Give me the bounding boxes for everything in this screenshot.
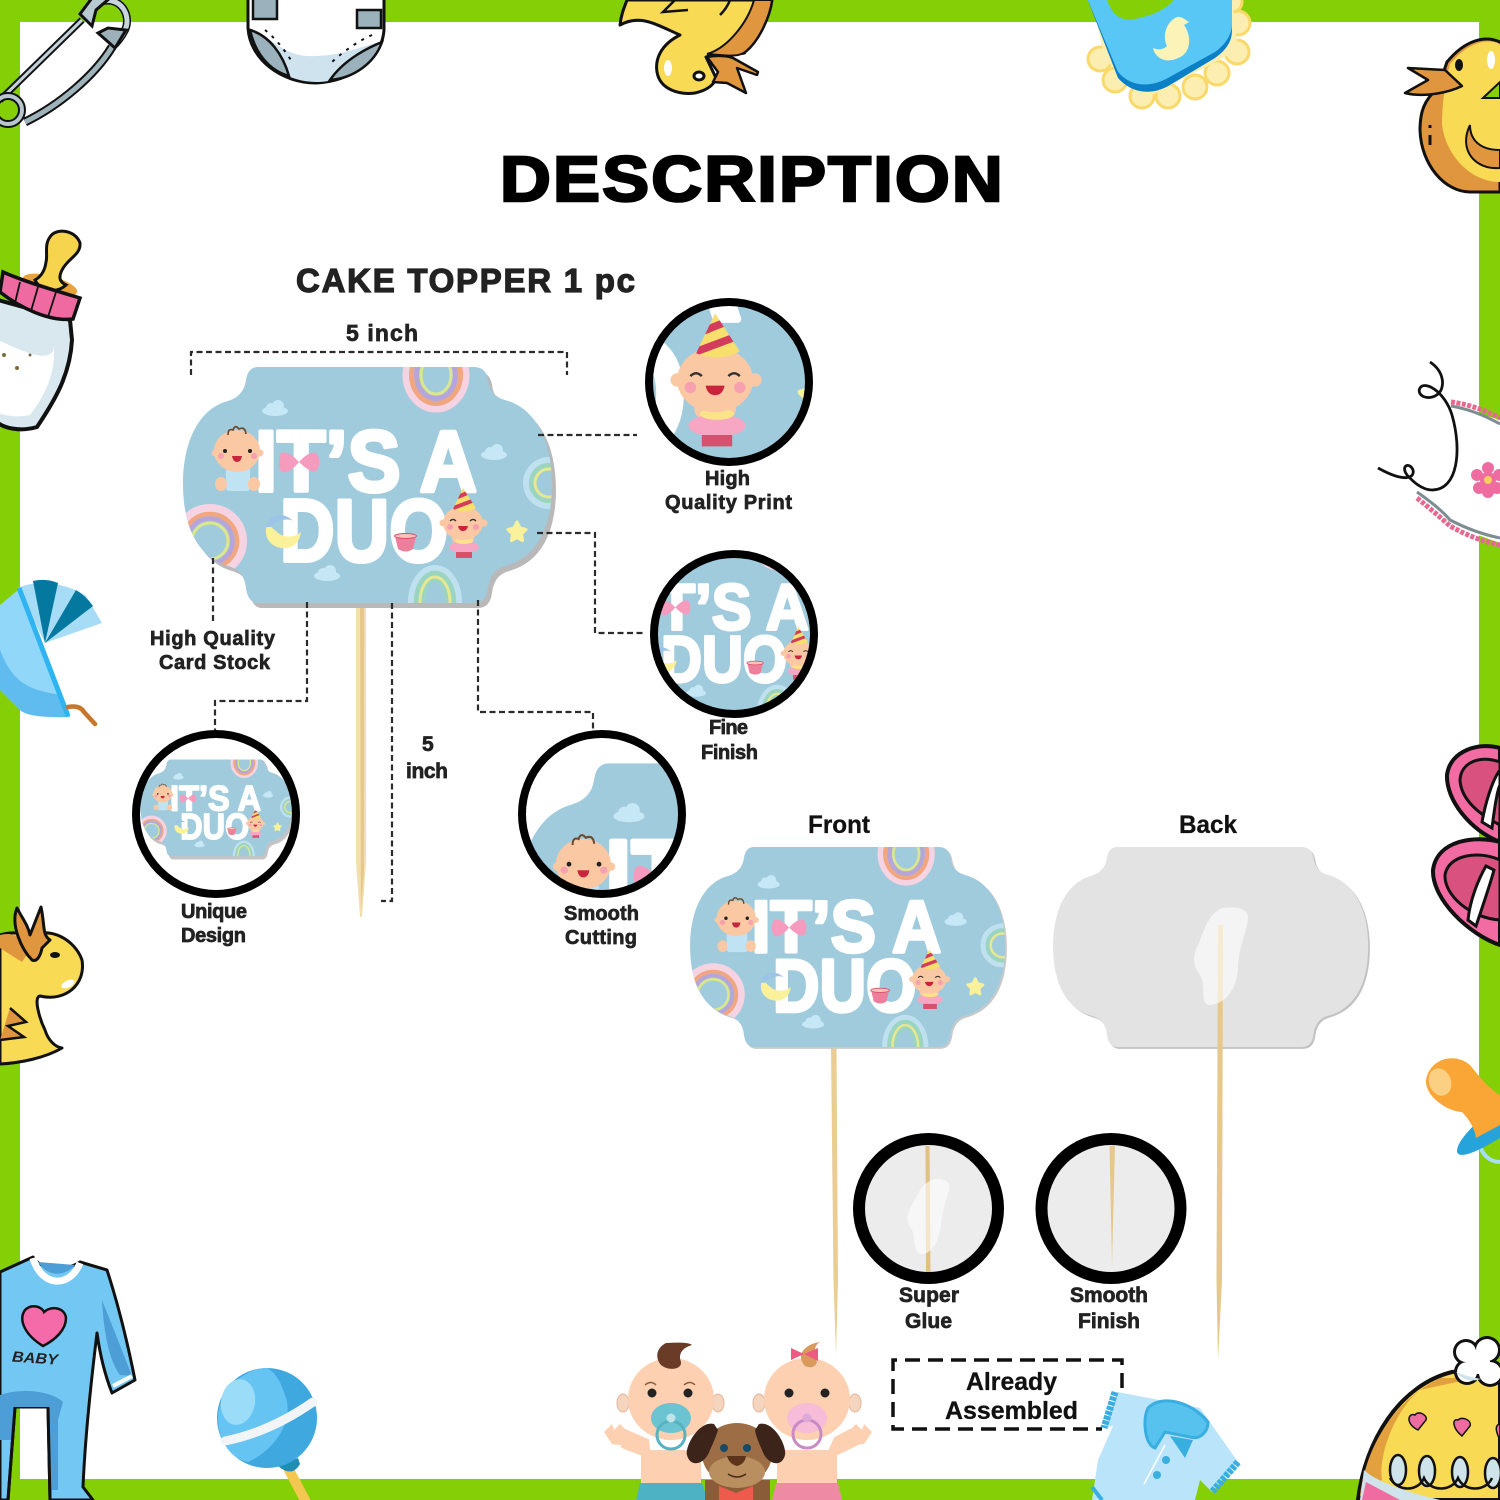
icon: yellow animal left (0, 907, 82, 1064)
callout: high quality print: Quality Print (665, 492, 792, 514)
icon: safety pin (0, 0, 127, 124)
icon: feeding bottle (0, 231, 80, 429)
callout: smooth cutting (518, 730, 686, 948)
callout: unique design: Unique (181, 901, 247, 923)
topper: front view: DUO (773, 944, 916, 1027)
icon: stroller (0, 580, 102, 724)
title: DESCRIPTION (500, 144, 1003, 215)
icon: ribbon bib right (1378, 362, 1500, 545)
icon: baby romper (0, 1257, 135, 1500)
callout: already assembled (893, 1360, 1122, 1429)
label: high quality card stock: High Quality (150, 628, 276, 650)
callout: super glue: Super (899, 1284, 959, 1307)
icon: blue rattle (217, 1368, 317, 1500)
callout: smooth finish: Smooth (1070, 1284, 1148, 1307)
label: high quality card stock (150, 628, 276, 674)
label: high quality card stock: Card Stock (159, 652, 271, 674)
leader lines (213, 435, 645, 901)
callout: fine finish: IT’S A (642, 571, 809, 643)
topper: main front: IT’S A (255, 414, 477, 510)
topper: front view (685, 825, 1022, 1355)
callout: fine finish: Finish (701, 742, 758, 764)
text: BABY: BABY (11, 1349, 61, 1369)
heading: cake topper: CAKE TOPPER 1 pc (296, 262, 635, 299)
icon: rubber duck right (1405, 39, 1500, 192)
label: height 5 inch: inch (406, 760, 448, 783)
topper: main front (177, 341, 572, 636)
callout: smooth cutting: IT’S A (605, 819, 871, 934)
callout: already assembled: Assembled (945, 1397, 1078, 1425)
callout: super glue: Glue (905, 1310, 952, 1333)
heading: front: Front (808, 811, 871, 839)
callout: high quality print (645, 298, 813, 514)
icon: diaper (248, 0, 384, 83)
callout: unique design: Design (181, 925, 246, 947)
callout: unique design: DUO (180, 806, 249, 847)
callout: high quality print: IT’S A (320, 171, 742, 354)
callout: fine finish: DUO (661, 622, 787, 696)
callout: high quality print: High (705, 468, 750, 490)
callout: smooth cutting: Smooth (564, 903, 639, 925)
topper: main front: DUO (280, 481, 448, 580)
icon: blue bib (1087, 0, 1250, 108)
callout: unique design: IT’S A (170, 779, 261, 818)
stick: main topper (356, 603, 366, 917)
label: width 5 inch: 5 inch (346, 320, 418, 346)
callout: super glue (859, 1139, 998, 1333)
callout: fine finish: Fine (709, 717, 748, 739)
icon: knit hat (1358, 1336, 1500, 1500)
topper: back view (1053, 847, 1370, 1360)
topper: front view: IT’S A (752, 886, 941, 968)
icon: upside-down duck (620, 0, 772, 93)
icon: orange pacifier right (1425, 1058, 1500, 1162)
callout: smooth cutting: Cutting (565, 927, 637, 949)
icon: pink baby shoes (1433, 746, 1500, 945)
callout: high quality print: DUO (367, 302, 687, 488)
icon: blue baby shirt (1092, 1392, 1238, 1500)
callout: unique design (136, 734, 300, 947)
callout: smooth cutting: DUO (635, 901, 837, 1019)
callout: fine finish (650, 550, 818, 760)
icon: twin babies and puppy (604, 1342, 872, 1500)
dimension: width bracket (191, 352, 567, 375)
label: height 5 inch: 5 (422, 733, 434, 756)
callout: smooth finish: Finish (1078, 1310, 1140, 1333)
heading: back: Back (1179, 811, 1237, 839)
callout: already assembled: Already (966, 1368, 1057, 1396)
label: height 5 inch (406, 733, 448, 783)
callout: smooth finish (1042, 1139, 1180, 1333)
